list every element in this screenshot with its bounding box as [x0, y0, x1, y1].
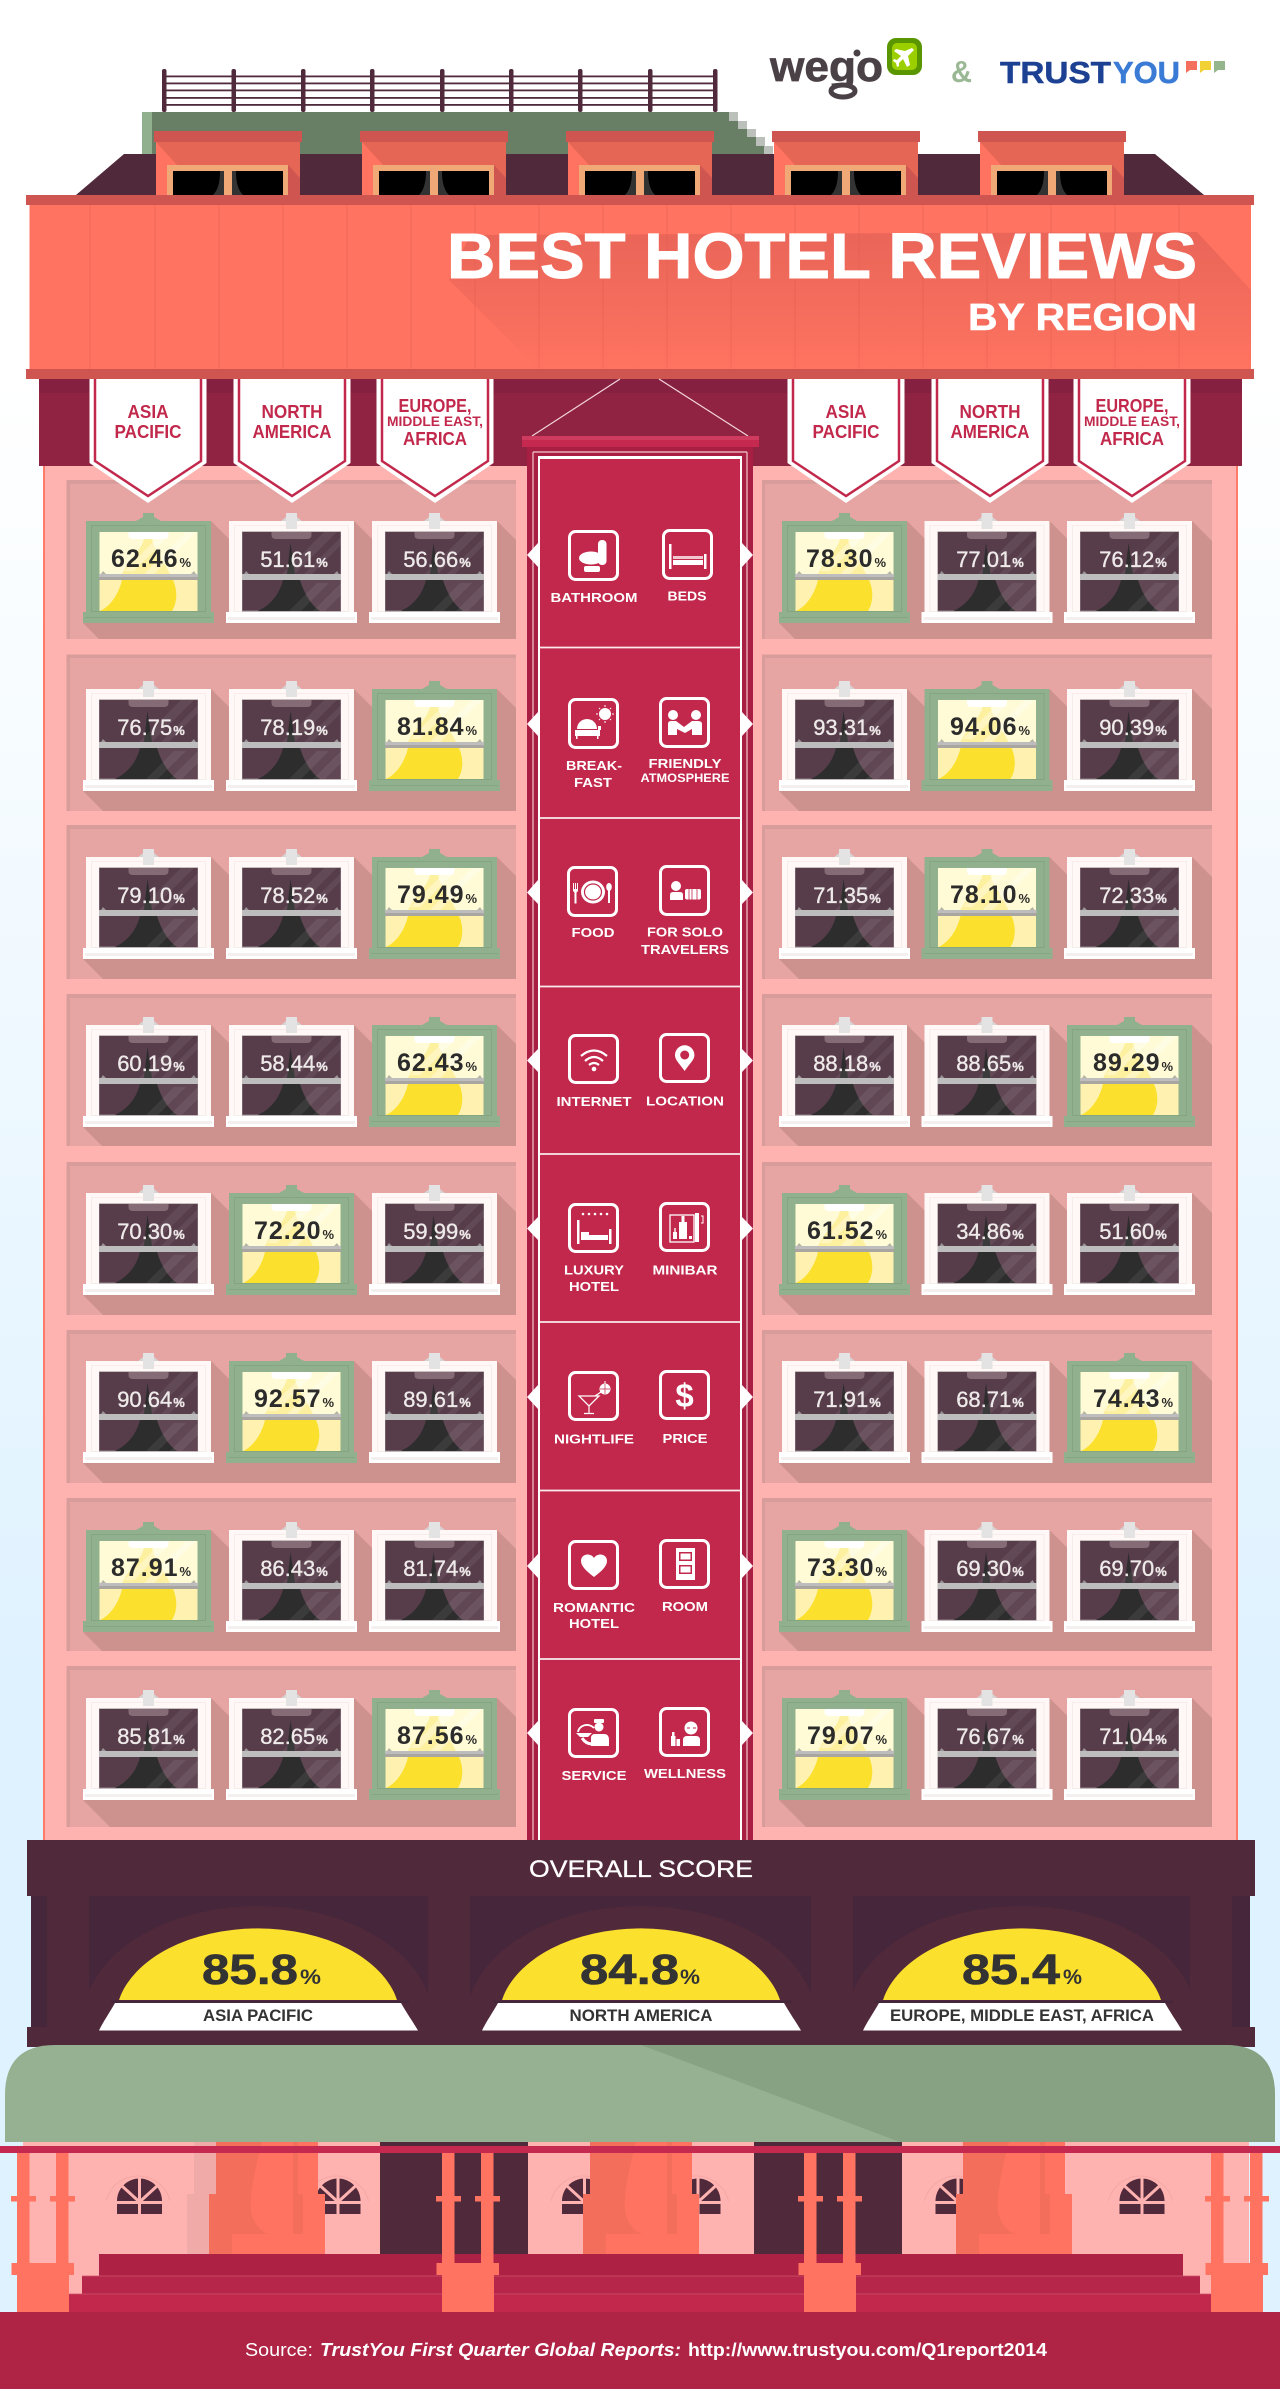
panel: row 4 left (internet) [66, 994, 516, 1146]
banner: EMEA left: MIDDLE EAST, [387, 413, 483, 429]
icon: room [660, 1540, 708, 1588]
panel: row 6 right (price) [762, 1330, 1212, 1483]
window: 89.29: 89.29% [1093, 1049, 1174, 1077]
footer: Source: [245, 2340, 313, 2360]
window: 69.70 [1064, 1522, 1195, 1632]
porch posts [11, 2153, 1269, 2312]
hanging wires [532, 379, 748, 436]
window: 51.60: 51.60% [1099, 1219, 1167, 1244]
window: 78.10 [922, 849, 1052, 959]
label: beds: BEDS [668, 588, 707, 604]
score: North America [466, 1906, 816, 2136]
window: 94.06: 94.06% [950, 713, 1030, 741]
window: 56.66: 56.66% [403, 547, 471, 572]
banner: North America right [932, 379, 1048, 503]
label: food: FOOD [572, 925, 614, 940]
icon: food [568, 868, 616, 916]
label: nightlife: NIGHTLIFE [554, 1432, 634, 1446]
front steps [69, 2254, 1211, 2312]
window: 59.99 [369, 1185, 500, 1295]
footer: TrustYou First Quarter Global Reports: [320, 2340, 681, 2360]
panel: row 7 right (room) [762, 1498, 1212, 1651]
panel: row 3 right (solo travelers) [762, 825, 1212, 979]
window: 79.49: 79.49% [397, 881, 478, 909]
window: 79.10: 79.10% [117, 883, 185, 908]
icon: luxury hotel [570, 1204, 618, 1252]
window: 71.35 [779, 849, 910, 959]
window: 62.46: 62.46% [111, 545, 192, 573]
panel: row 1 left (bathroom) [66, 480, 516, 639]
window: 51.60 [1064, 1185, 1195, 1295]
banner: EMEA right: AFRICA [1100, 429, 1164, 449]
roof fence [162, 69, 718, 112]
window: 72.33: 72.33% [1099, 883, 1167, 908]
window: 68.71: 68.71% [956, 1387, 1024, 1412]
window: 86.43: 86.43% [260, 1556, 328, 1581]
window: 72.33 [1064, 849, 1195, 959]
panel: row 1 right (beds) [762, 480, 1212, 639]
score: Asia Pacific: % [300, 1966, 321, 1989]
window: 90.64 [83, 1353, 214, 1463]
overall score band [27, 1840, 1255, 2047]
label: friendly atmosphere: ATMOSPHERE [640, 771, 730, 785]
icon: romantic hotel [570, 1542, 618, 1588]
banner: North America right: NORTH [960, 402, 1020, 422]
icon: price [660, 1372, 708, 1418]
window: 71.04 [1064, 1690, 1195, 1800]
label: friendly atmosphere: FRIENDLY [648, 756, 722, 771]
window: 88.18: 88.18% [813, 1051, 881, 1076]
window: 76.75 [83, 681, 214, 791]
label: service: SERVICE [562, 1768, 627, 1783]
window: 79.49 [369, 849, 500, 959]
panel: row 2 left (breakfast) [66, 654, 516, 811]
score: North America: % [680, 1966, 700, 1989]
label: room: ROOM [662, 1599, 708, 1614]
window: 81.74: 81.74% [403, 1556, 471, 1581]
window: 81.84: 81.84% [397, 713, 478, 741]
window: 60.19 [83, 1017, 214, 1127]
footer [0, 2312, 1280, 2389]
window: 76.12 [1064, 513, 1195, 623]
banner: EMEA left: AFRICA [403, 429, 467, 449]
icon: minibar [660, 1204, 708, 1250]
label: internet: INTERNET [556, 1094, 632, 1109]
panel: row 7 left (romantic hotel) [66, 1498, 516, 1651]
window: 74.43: 74.43% [1093, 1385, 1174, 1413]
window: 89.29 [1064, 1017, 1195, 1127]
awning [5, 2045, 1275, 2142]
window: 72.20 [226, 1185, 357, 1295]
ground floor wall [23, 2142, 1249, 2312]
banner: EMEA right [1074, 379, 1190, 503]
panel: row 3 left (food) [66, 825, 516, 979]
window: 51.61 [226, 513, 357, 623]
window: 90.64: 90.64% [117, 1387, 185, 1412]
window: 76.67: 76.67% [956, 1724, 1024, 1749]
label: location: LOCATION [646, 1094, 724, 1108]
banner: Asia Pacific left: ASIA [128, 402, 168, 422]
window: 76.67 [922, 1690, 1052, 1800]
icon: location [660, 1034, 708, 1082]
score: Europe, Middle East, Africa: 85.4 [962, 1946, 1060, 1994]
window: 92.57: 92.57% [254, 1385, 334, 1413]
banner: EMEA right: MIDDLE EAST, [1084, 413, 1180, 429]
banner: North America right: AMERICA [950, 422, 1030, 442]
label: minibar: MINIBAR [652, 1262, 718, 1278]
logo: wego [769, 38, 922, 97]
window: 87.56: 87.56% [397, 1722, 478, 1750]
banner: North America left: NORTH [262, 402, 322, 422]
center banner [522, 436, 759, 1840]
window: 81.84 [369, 681, 500, 791]
porch rail [0, 2146, 1280, 2153]
icon: beds [664, 530, 712, 578]
panel: row 6 left (nightlife) [66, 1330, 516, 1483]
dormer windows [154, 131, 1126, 195]
window: 62.43: 62.43% [397, 1049, 478, 1077]
icon: price: $ [675, 1377, 694, 1414]
icon: friendly atmosphere [660, 698, 708, 746]
window: 56.66 [369, 513, 500, 623]
window: 78.19: 78.19% [260, 715, 328, 740]
window: 85.81: 85.81% [117, 1724, 185, 1749]
banner: Asia Pacific right: ASIA [826, 402, 866, 422]
banner: EMEA left [376, 379, 494, 503]
label: romantic hotel: HOTEL [569, 1616, 619, 1631]
label: breakfast: BREAK- [566, 758, 622, 773]
window: 61.52: 61.52% [807, 1217, 888, 1245]
window: 87.91: 87.91% [111, 1554, 192, 1582]
icon: service [570, 1710, 618, 1756]
window: 34.86 [922, 1185, 1052, 1295]
logo: wego: wego [769, 43, 883, 91]
banner: EMEA left: EUROPE, [398, 396, 472, 416]
window: 51.61: 51.61% [260, 547, 328, 572]
logo: trustyou [1000, 55, 1225, 90]
ampersand: & [951, 54, 972, 89]
window: 69.70: 69.70% [1099, 1556, 1167, 1581]
window: 71.04: 71.04% [1099, 1724, 1167, 1749]
window: 69.30: 69.30% [956, 1556, 1024, 1581]
icon: bathroom [570, 532, 618, 580]
window: 78.52: 78.52% [260, 883, 328, 908]
window: 62.46 [83, 513, 214, 623]
panel: row 4 right (location) [762, 994, 1212, 1146]
window: 79.07 [779, 1690, 910, 1800]
icon: wellness [660, 1708, 708, 1756]
banner: North America left: AMERICA [252, 422, 332, 442]
score: Europe, Middle East, Africa [847, 1906, 1197, 2136]
banner: Asia Pacific right: PACIFIC [812, 422, 880, 442]
sign board [26, 195, 1254, 379]
label: luxury hotel: HOTEL [569, 1279, 619, 1294]
icon: internet [570, 1036, 618, 1082]
window: 81.74 [369, 1522, 500, 1632]
window: 72.20: 72.20% [254, 1217, 334, 1245]
label: romantic hotel: ROMANTIC [553, 1600, 636, 1615]
label: luxury hotel [564, 1262, 624, 1294]
window: 73.30 [779, 1522, 910, 1632]
banner: Asia Pacific left [90, 379, 206, 503]
window: 71.91 [779, 1353, 910, 1463]
overall score heading: OVERALL SCORE [529, 1856, 753, 1883]
footer: http://www.trustyou.com/Q1report2014 [688, 2340, 1047, 2360]
label: price: PRICE [662, 1431, 708, 1446]
window: 89.61 [369, 1353, 500, 1463]
window: 71.91: 71.91% [813, 1387, 881, 1412]
window: 78.30: 78.30% [806, 545, 886, 573]
banner: Asia Pacific left: PACIFIC [114, 422, 182, 442]
panel: row 2 right (friendly atmosphere) [762, 654, 1212, 811]
window: 88.65 [922, 1017, 1052, 1127]
window: 88.65: 88.65% [956, 1051, 1024, 1076]
banner: EMEA right: EUROPE, [1096, 396, 1168, 416]
maroon fascia [39, 379, 1242, 466]
label: friendly atmosphere [640, 756, 730, 785]
score: Europe, Middle East, Africa: % [1063, 1966, 1082, 1989]
window: 86.43 [226, 1522, 357, 1632]
score: Asia Pacific [83, 1906, 433, 2136]
entrance columns [187, 2142, 1072, 2254]
window: 34.86: 34.86% [956, 1219, 1024, 1244]
window: 79.07: 79.07% [807, 1722, 888, 1750]
window: 70.30: 70.30% [117, 1219, 185, 1244]
window: 93.31: 93.31% [813, 715, 881, 740]
window: 77.01: 77.01% [956, 547, 1024, 572]
score: Asia Pacific: ASIA PACIFIC [203, 2006, 313, 2025]
window: 89.61: 89.61% [403, 1387, 471, 1412]
window: 76.12: 76.12% [1099, 547, 1167, 572]
window: 74.43 [1064, 1353, 1195, 1463]
label: romantic hotel [553, 1600, 636, 1631]
score: North America: NORTH AMERICA [570, 2006, 712, 2025]
window: 71.35: 71.35% [813, 883, 881, 908]
icon: solo travelers [660, 866, 708, 914]
window: 76.75: 76.75% [117, 715, 185, 740]
window: 69.30 [922, 1522, 1052, 1632]
logo: trustyou: TRUST [1000, 55, 1111, 90]
window: 58.44 [226, 1017, 357, 1127]
window: 62.43 [369, 1017, 500, 1127]
window: 68.71 [922, 1353, 1052, 1463]
window: 77.01 [922, 513, 1052, 623]
score: Asia Pacific: 85.8 [202, 1946, 298, 1994]
label: breakfast: FAST [574, 775, 612, 790]
window: 59.99: 59.99% [403, 1219, 471, 1244]
window: 78.19 [226, 681, 357, 791]
window: 88.18 [779, 1017, 910, 1127]
window: 61.52 [779, 1185, 910, 1295]
banner: North America left [234, 379, 350, 503]
roof [76, 154, 1204, 195]
title: BEST HOTEL REVIEWS [447, 220, 1197, 292]
window: 90.39: 90.39% [1099, 715, 1167, 740]
score: Europe, Middle East, Africa: EUROPE, MIDDLE EAST, AFRICA [890, 2006, 1154, 2025]
window: 79.10 [83, 849, 214, 959]
label: bathroom: BATHROOM [550, 590, 638, 605]
subtitle: BY REGION [968, 297, 1197, 339]
logo: trustyou: YOU [1113, 55, 1180, 90]
window: 93.31 [779, 681, 910, 791]
label: solo travelers: TRAVELERS [641, 942, 729, 957]
window: 73.30: 73.30% [807, 1554, 888, 1582]
label: breakfast [566, 758, 622, 790]
panel: row 8 left (service) [66, 1666, 516, 1827]
window: 78.52 [226, 849, 357, 959]
label: luxury hotel: LUXURY [564, 1262, 624, 1278]
panel: row 5 right (minibar) [762, 1162, 1212, 1315]
roof terrace [142, 112, 773, 154]
window: 87.56 [369, 1690, 500, 1800]
window: 70.30 [83, 1185, 214, 1295]
window: 78.30 [779, 513, 910, 623]
window: 82.65: 82.65% [260, 1724, 328, 1749]
window: 82.65 [226, 1690, 357, 1800]
window: 94.06 [922, 681, 1052, 791]
window: 87.91 [83, 1522, 214, 1632]
window: 85.81 [83, 1690, 214, 1800]
panel: row 5 left (luxury hotel) [66, 1162, 516, 1315]
window: 58.44: 58.44% [260, 1051, 328, 1076]
window: 90.39 [1064, 681, 1195, 791]
window: 78.10: 78.10% [950, 881, 1030, 909]
label: solo travelers [641, 924, 729, 957]
panel: row 8 right (wellness) [762, 1666, 1212, 1827]
score: North America: 84.8 [580, 1946, 679, 1994]
window: 92.57 [226, 1353, 357, 1463]
icon: breakfast [570, 700, 618, 748]
small arched windows [106, 2176, 1172, 2214]
banner: Asia Pacific right [788, 379, 904, 503]
window: 60.19: 60.19% [117, 1051, 185, 1076]
pink wall [43, 466, 1238, 1840]
icon: nightlife [570, 1372, 618, 1420]
label: wellness: WELLNESS [644, 1766, 726, 1781]
label: solo travelers: FOR SOLO [647, 924, 723, 940]
